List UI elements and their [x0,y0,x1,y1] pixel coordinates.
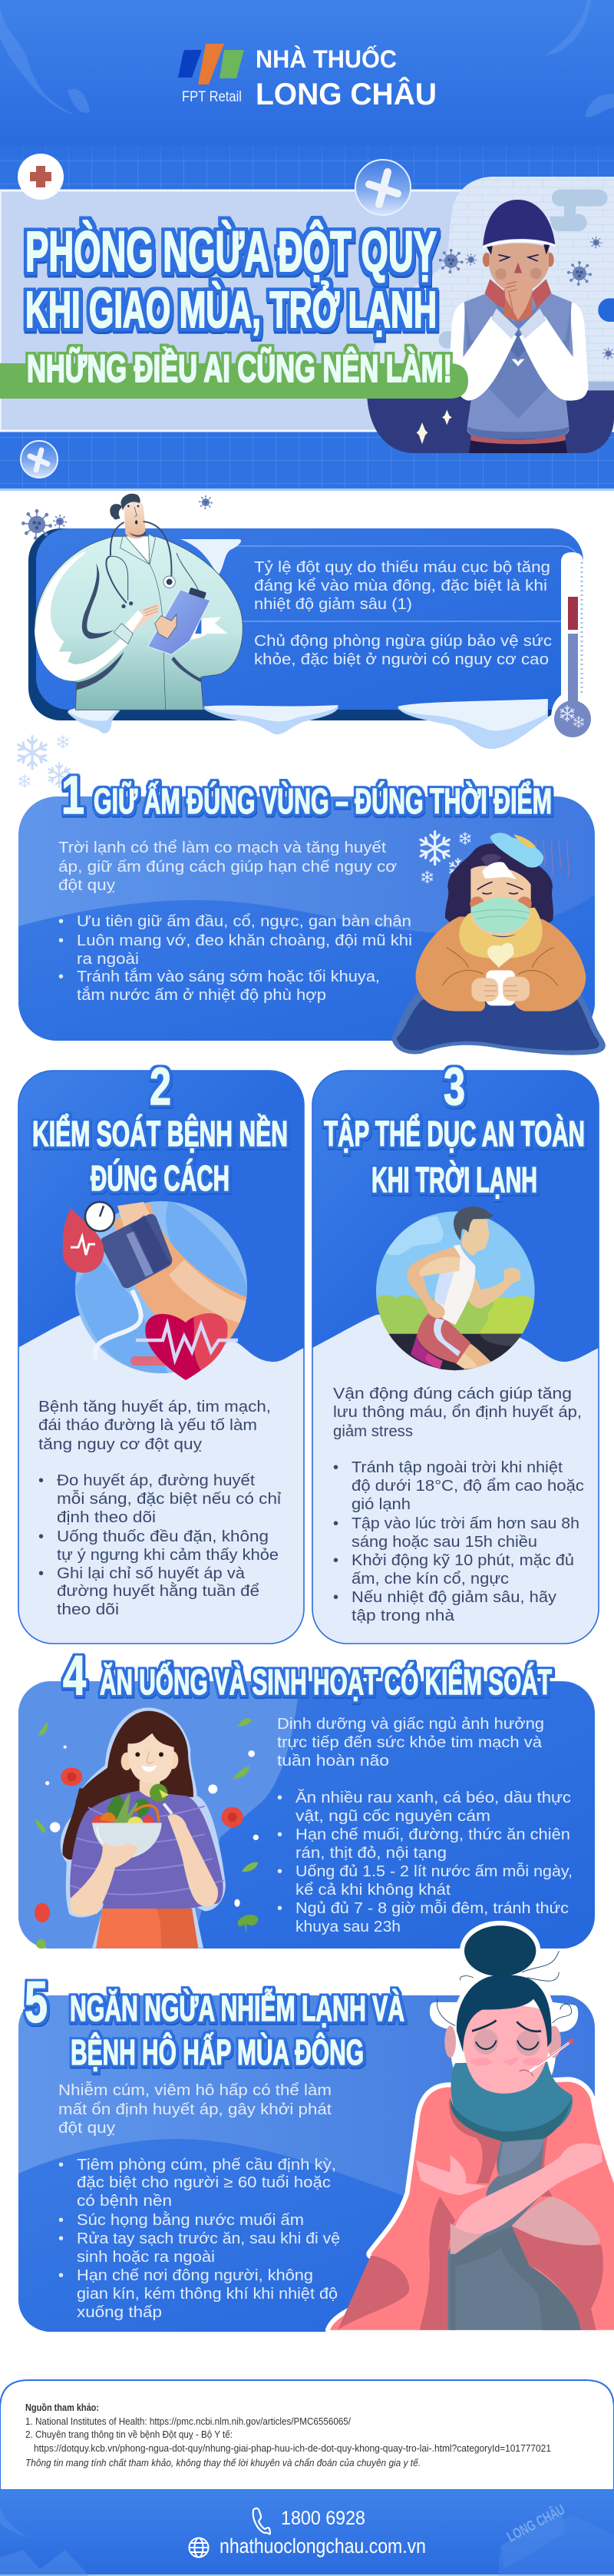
body text: kể cả khi không khát [295,1882,451,1899]
body text: • [58,932,64,949]
heading: NGĂN NGỪA NHIỄM LẠNH VÀ [70,1988,404,2028]
body text: Bệnh tăng huyết áp, tim mạch, [38,1399,271,1415]
heading: 3 [444,1057,465,1116]
references text: 1. National Institutes of Health: https://pmc.ncbi.nlm.nih.gov/articles/PMC6556065/ [25,2416,351,2427]
scarf [450,2098,572,2142]
illustration: runner [376,1207,535,1372]
far arm [468,1267,520,1308]
body text: • [333,1515,338,1532]
body text: Uống thuốc đều đặn, không [57,1528,269,1545]
references text: 2. Chuyên trang thông tin về bệnh Đột quỵ - Bộ Y tế: [25,2429,233,2440]
navy floor [367,390,614,453]
body text: ra ngoài [77,951,139,968]
illustration: sick woman with mask under blanket [391,832,606,1055]
hero section background grid [0,145,614,491]
body text: tự ý ngưng khi cảm thấy khỏe [57,1547,279,1564]
body text: Khởi động kỹ 10 phút, mặc đủ [352,1552,574,1569]
heading [32,1057,288,1198]
body text: • [58,968,64,985]
brand name line 2: LONG CHÂU [256,76,437,111]
shirt and collar [125,536,148,561]
body text: Tránh tắm vào sáng sớm hoặc tối khuya, [77,968,380,985]
wall [367,177,614,390]
body text: giảm stress [333,1423,413,1440]
body text: Nếu nhiệt độ giảm sâu, hãy [352,1589,556,1606]
snowflakes [421,832,470,883]
clipboard [148,590,210,654]
body text: khuya sau 23h [295,1919,401,1935]
illustration: doctor [35,494,243,710]
hair bun [464,1925,536,1976]
snow on intro panel [68,539,548,749]
heading: KIỂM SOÁT BỆNH NỀN [32,1114,288,1154]
panel 2: manage underlying conditions [18,1057,304,1644]
arms [71,1843,138,1915]
bowl [92,1823,162,1859]
body text: Súc họng bằng nước muối ấm [77,2211,304,2229]
body text: Hạn chế muối, đường, thức ăn chiên [295,1826,570,1843]
face [463,2005,551,2094]
icon: globe [189,2538,209,2558]
body text: Vận động đúng cách giúp tăng [333,1386,572,1402]
body text [58,839,412,1004]
sparkles [417,409,452,444]
illustration: man coughing in front of wall [367,177,614,453]
mask [470,897,530,933]
body text: rán, thịt đỏ, nội tạng [295,1845,447,1862]
body text: độ dưới 18°C, độ ẩm cao hoặc [352,1478,584,1495]
website: nhathuoclongchau.com.vn [220,2535,426,2558]
panel 1: keep warm [18,765,595,1041]
blanket [391,992,606,1055]
hair [63,1711,193,1855]
references text: https://dotquy.kcb.vn/phong-ngua-dot-quy/nhung-giai-phap-huu-ich-de-dot-quy-khong-quay-tro-lai-.html?categoryId=101777021 [34,2443,551,2454]
body text: Ngủ đủ 7 - 8 giờ mỗi đêm, tránh thức [295,1899,569,1917]
hat [483,200,555,246]
heading [63,1645,552,1707]
heading [25,1970,404,2072]
body text: • [38,1565,44,1582]
body text: • [277,1900,282,1917]
body text: mất ổn định huyết áp, gây khởi phát [58,2101,332,2118]
body text: sáng hoặc sau 15h chiều [352,1534,537,1551]
neck and collar [504,286,532,321]
footer [0,2490,614,2576]
illustration: sick woman wrapped in blanket [330,1925,614,2330]
header band [0,0,614,145]
fork and broccoli [163,1803,172,1814]
icon: small glass bubble with cross [21,441,58,478]
top [70,1791,223,1909]
sweater [463,293,573,439]
body text: tăng nguy cơ đột quỵ [38,1436,202,1453]
panel background [18,1995,595,2332]
references text [25,2402,551,2468]
body text: Đo huyết áp, đường huyết [57,1472,255,1489]
body text: • [38,1528,44,1545]
body text: tắm nước ấm ở nhiệt độ phù hợp [77,986,326,1004]
body text: • [58,2212,64,2229]
body text: Uống đủ 1.5 - 2 lít nước ấm mỗi ngày, [295,1862,573,1880]
panel 3: exercise safely [312,1057,599,1644]
body text: Ghi lại chỉ số huyết áp và [57,1565,246,1582]
intro text: đáng kể vào mùa đông, đặc biệt là khi [254,578,547,594]
icon: FPT bars [178,44,244,84]
cup and hands [486,970,515,1005]
body text: Nhiễm cúm, viêm hô hấp có thể làm [58,2081,332,2099]
body text: ấm, che kín cổ, ngực [352,1571,509,1588]
footer: LONG CHÂU [504,2501,568,2545]
panel background [18,1681,595,1949]
panel background [18,796,595,1041]
body text: gian kín, kém thông khí khi nhiệt độ [77,2286,338,2303]
intro text [254,559,552,668]
body text: Tránh tập ngoài trời khi nhiệt [352,1459,563,1476]
body text: trực tiếp đến sức khỏe tim mạch và [277,1734,543,1751]
body text: • [58,2267,64,2284]
icon: glass bubble with cross [355,160,411,215]
body text [277,1716,573,1935]
thermometer [530,2041,570,2071]
right sleeve highlight [170,617,228,640]
salad [107,1796,124,1819]
coat [416,916,586,1012]
heat lines [536,839,569,878]
body text: tuần hoàn não [277,1753,389,1770]
references text: Nguồn tham khảo: [25,2402,99,2413]
stethoscope [106,521,171,603]
body text: áp, giữ ấm đúng cách giúp hạn chế nguy cơ [58,859,397,876]
body text: Luôn mang vớ, đeo khăn choàng, đội mũ khi [77,932,412,949]
body text: theo dõi [57,1601,119,1618]
body text: gió lạnh [352,1496,411,1513]
intro text: Chủ động phòng ngừa giúp bảo vệ sức [254,633,552,650]
floating tomatoes, leaves and dots [35,1718,259,1949]
body text: vật, ngũ cốc nguyên cám [295,1808,490,1825]
head [124,500,146,538]
panel background [312,1071,599,1644]
icon: phone [253,2508,270,2534]
legs [454,1343,491,1369]
decorative store and skyline [0,2508,614,2576]
body text: đường huyết hằng tuần để [57,1582,259,1600]
body text: sinh hoặc ra ngoài [77,2249,215,2266]
body text: có bệnh nền [77,2193,172,2210]
near arm [407,1247,460,1318]
coat [35,536,243,710]
ice bag [490,833,543,868]
body text: • [38,1472,44,1489]
body text: Tiêm phòng cúm, phế cầu định kỳ, [77,2157,336,2174]
heading: 4 [63,1645,86,1707]
body text: mỗi sáng, đặc biệt nếu có chỉ [57,1490,282,1508]
sleeve highlight [35,551,128,681]
head [483,253,490,267]
dress [447,2141,581,2330]
body text [38,1399,282,1618]
head [462,1219,489,1256]
heading: 1 [61,765,84,825]
panel 5: prevent cold and respiratory infections [18,1970,595,2332]
hands [125,603,159,632]
panel: references [0,2380,614,2490]
heading: ĐÚNG CÁCH [91,1158,229,1198]
body text: Ăn nhiều rau xanh, cá béo, dầu thực [295,1789,571,1806]
viruses [439,237,614,359]
illustration: blood pressure check [62,1201,249,1380]
heading [61,765,552,825]
blanket [330,2082,614,2330]
body text [333,1386,584,1624]
hair [457,1975,552,2052]
body text: đái tháo đường là yếu tố làm [38,1417,257,1434]
body text: • [277,1826,282,1843]
body text: xuống thấp [77,2304,162,2321]
body text: Hạn chế nơi đông người, không [77,2267,313,2284]
vest [435,1245,475,1325]
panel background [18,1071,304,1644]
stray hair [437,1951,572,2026]
intro text: Tỷ lệ đột quỵ do thiếu máu cục bộ tăng [254,559,550,576]
face [140,1780,160,1797]
green ribbon [0,363,468,399]
heading [324,1057,585,1200]
body text: • [277,1863,282,1880]
skirt [96,1909,198,1949]
body text: • [58,2230,64,2247]
title banner [0,220,468,399]
logo: FPT Retail and Nhà thuốc Long Châu [178,44,437,111]
body text: lưu thông máu, ổn định huyết áp, [333,1404,582,1421]
sleeves [451,302,517,401]
references text: Thông tin mang tính chất tham khảo, không thay thế lời khuyên và chẩn đoán của chuyên gia y tế. [25,2458,421,2468]
panel 4: diet and lifestyle [18,1645,595,1949]
body text: đột quỵ [58,2120,115,2137]
body text: • [58,913,64,930]
face [470,866,531,935]
icon: thermometer [551,552,594,740]
body text: • [333,1552,338,1569]
icon: medical badge with red cross [18,154,64,200]
body text: • [333,1459,338,1476]
FPT Retail wordmark: FPT Retail [182,89,242,105]
arms [451,2223,486,2254]
body text: Dinh dưỡng và giấc ngủ ảnh hưởng [277,1716,544,1733]
body text: • [333,1589,338,1606]
body text: • [58,2157,64,2174]
intro text: nhiệt độ giảm sâu (1) [254,596,412,613]
scarf [459,908,543,959]
hands [504,275,532,320]
body text: Trời lạnh có thể làm co mạch và tăng huyết [58,839,386,856]
body text [58,2081,340,2321]
body text: • [277,1790,282,1806]
panel: introduction [28,528,583,720]
phone number: 1800 6928 [281,2508,365,2529]
body text: đột quỵ [58,877,115,894]
main title [25,220,437,339]
heading: BỆNH HÔ HẤP MÙA ĐÔNG [71,2032,364,2072]
white sticker outline [330,1925,614,2330]
body text: Rửa tay sạch trước ăn, sau khi đi vệ [77,2230,340,2247]
steam [487,943,514,968]
body text: định theo dõi [57,1509,156,1526]
hair [445,843,553,925]
intro text: khỏe, đặc biệt ở người có nguy cơ cao [254,651,549,668]
body text: đặc biệt cho người ≥ 60 tuổi hoặc [77,2174,331,2191]
decorative viruses around doctor [22,495,213,539]
outline [61,1707,226,1949]
icon: snowflakes top-left of section 1 [18,736,70,787]
brand name line 1: NHÀ THUỐC [256,45,397,73]
illustration: woman eating salad [35,1707,259,1949]
coat shadows [82,563,114,639]
shorts [417,1313,470,1363]
heading: 5 [25,1970,48,2035]
body text: Ưu tiên giữ ấm đầu, cổ, ngực, gan bàn chân [77,913,411,930]
body text: tập trong nhà [352,1608,455,1624]
body text: Tập vào lúc trời ấm hơn sau 8h [352,1515,579,1532]
blanket shadows [338,2098,603,2330]
heading: 2 [150,1057,171,1116]
